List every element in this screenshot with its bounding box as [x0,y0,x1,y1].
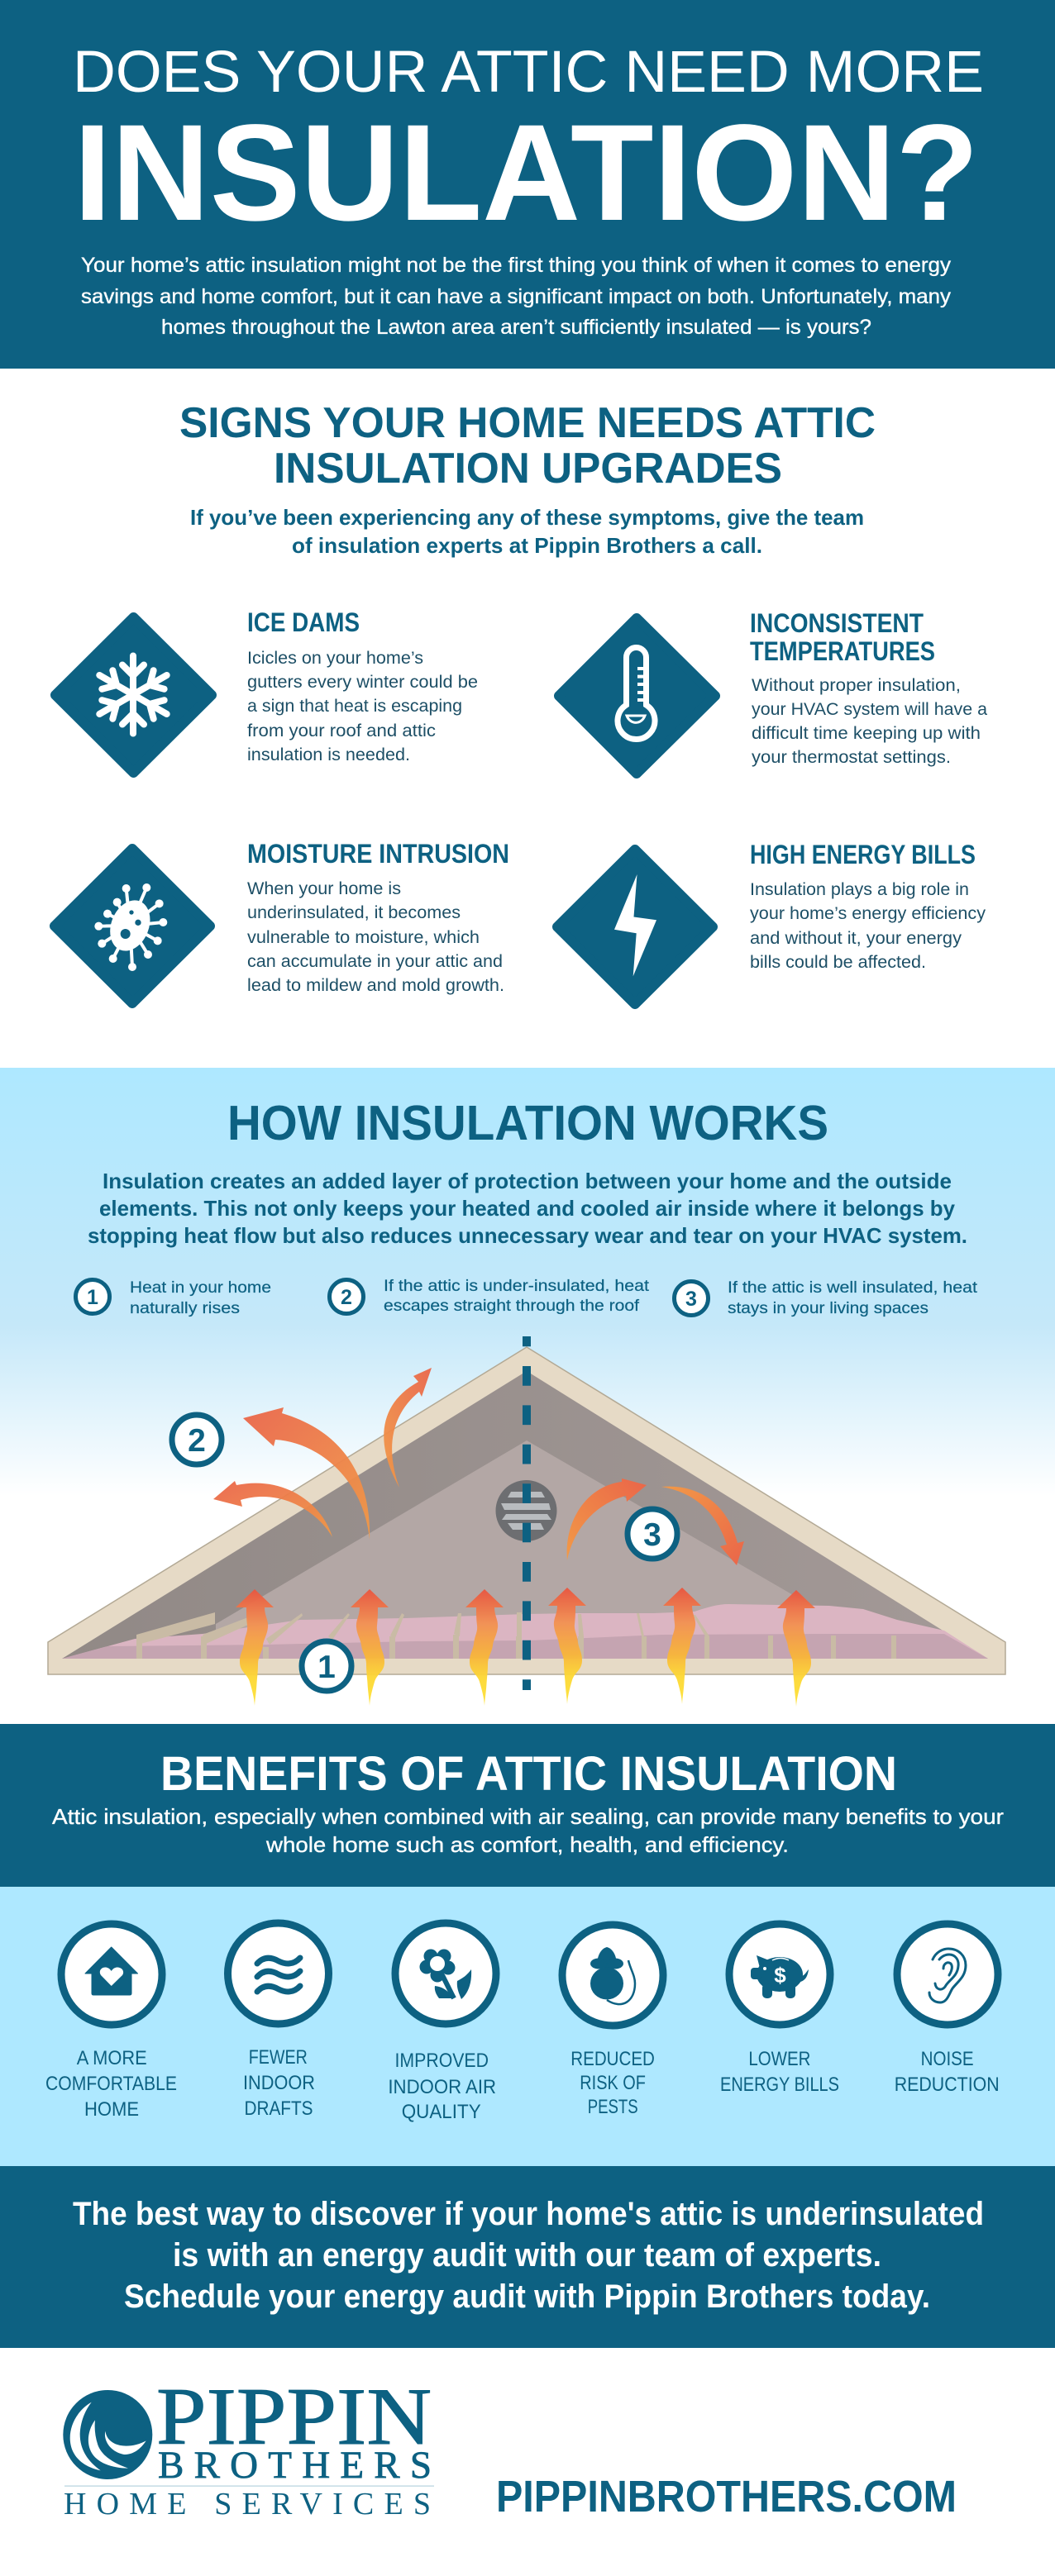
badge 2: 2 [188,1423,206,1459]
item: moisture intrusion: can accumulate in your attic and [247,951,503,971]
step 3 [675,1278,978,1317]
step 2: escapes straight through the roof [384,1297,640,1315]
step 1: Heat in your home [130,1278,271,1297]
benefit: noise reduction: NOISE [921,2048,974,2070]
signs subheading: If you’ve been experiencing any of these symptoms, give the team [190,505,864,530]
item: moisture intrusion: MOISTURE INTRUSION [247,839,509,869]
logo emblem [63,2390,152,2479]
signs heading: INSULATION UPGRADES [274,445,782,493]
roof and floor frame [48,1347,1005,1674]
panel: header [0,0,1055,369]
benefits paragraph [52,1804,1004,1857]
title line: insulation: INSULATION? [74,97,979,250]
intro paragraph: homes throughout the Lawton area aren’t sufficiently insulated — is yours? [161,316,871,339]
signs heading: SIGNS YOUR HOME NEEDS ATTIC [179,399,876,447]
logo wordmark [64,2372,432,2521]
benefit: fewer drafts: INDOOR [243,2072,315,2094]
attic air space [62,1371,988,1659]
item: moisture intrusion [247,839,509,995]
item: high energy bills: Insulation plays a big role in [750,879,969,899]
signs heading [179,399,876,493]
benefit: comfortable home [45,1924,177,2121]
panel: call to action [0,2166,1055,2348]
logo wordmark: HOME SERVICES [64,2487,431,2521]
call to action text [73,2196,984,2315]
attic cross-section diagram [48,1336,1005,1707]
icon: thermometer diamond [559,618,715,774]
call to action text: The best way to discover if your home's attic is underinsulated [73,2196,984,2232]
panel: benefits header [0,1724,1055,1887]
benefit: indoor air quality: QUALITY [402,2101,481,2123]
badge 2 [172,1415,222,1464]
item: high energy bills: HIGH ENERGY BILLS [750,840,976,869]
signs subheading: of insulation experts at Pippin Brothers a call. [292,533,762,558]
item: high energy bills: bills could be affected. [750,952,926,972]
logo [63,2372,434,2521]
item: high energy bills: and without it, your energy [750,928,962,948]
item: inconsistent temperatures: your thermostat settings. [752,747,951,767]
item: moisture intrusion: vulnerable to moisture, which [247,927,480,947]
arrows: heat rising [236,1588,815,1707]
item: moisture intrusion: When your home is [247,879,401,898]
item: inconsistent temperatures: difficult time keeping up with [752,723,981,743]
step 1 [76,1278,271,1317]
step 2 [329,1277,650,1315]
icon: snowflake diamond [55,617,212,773]
benefit: comfortable home: COMFORTABLE [45,2073,177,2095]
attic vent [496,1480,557,1541]
how heading: HOW INSULATION WORKS [227,1096,828,1150]
signs subheading [190,505,864,558]
item: inconsistent temperatures: Without proper insulation, [752,675,961,695]
website address: PIPPINBROTHERS.COM [496,2472,957,2521]
step 3: 3 [685,1288,697,1311]
benefit: comfortable home: A MORE [77,2047,147,2069]
benefit: lower energy bills: $ [774,1963,786,1988]
badge 3 [628,1509,677,1559]
step 2: If the attic is under-insulated, heat [384,1277,650,1295]
benefit: indoor air quality [388,1923,496,2123]
benefit: noise reduction: REDUCTION [895,2074,1000,2096]
step 2: 2 [341,1286,352,1309]
benefit: noise reduction [895,1924,1000,2096]
item: moisture intrusion: underinsulated, it becomes [247,902,461,922]
icon: lightning bolt diamond [557,850,713,1004]
benefit: fewer drafts: DRAFTS [245,2097,313,2120]
step 1: 1 [87,1286,98,1309]
item: inconsistent temperatures [750,608,987,767]
logo wordmark: PIPPIN [156,2372,432,2462]
how paragraph: Insulation creates an added layer of protection between your home and the outside [103,1169,952,1193]
benefit: reduced pests: REDUCED [570,2048,655,2070]
how paragraph: stopping heat flow but also reduces unnecessary wear and tear on your HVAC system. [88,1223,967,1248]
insulation lower layer [62,1634,988,1659]
dashed centre line [523,1336,531,1690]
item: ice dams: ICE DAMS [247,607,360,637]
item: ice dams: from your roof and attic [247,721,436,740]
item: high energy bills [750,840,986,972]
step 3: If the attic is well insulated, heat [728,1278,978,1297]
title line: does your attic need more: DOES YOUR ATTIC NEED MORE [73,40,984,105]
benefit: reduced pests: RISK OF [580,2072,646,2094]
item: ice dams: Icicles on your home’s [247,648,423,668]
arrows: heat escaping through roof [213,1368,432,1540]
item: inconsistent temperatures: INCONSISTENT [750,608,924,638]
benefit: comfortable home: HOME [84,2098,139,2121]
benefit: fewer drafts [228,1923,329,2120]
arrows: heat retained in living space [567,1478,744,1565]
benefit: lower energy bills [720,1924,839,2096]
item: inconsistent temperatures: TEMPERATURES [750,636,935,666]
item: ice dams: a sign that heat is escaping [247,696,462,716]
how paragraph [88,1169,967,1248]
benefits paragraph: Attic insulation, especially when combined with air sealing, can provide many benefits to your [52,1804,1004,1829]
step 3: stays in your living spaces [728,1299,928,1317]
benefit: reduced pests [562,1925,663,2118]
item: inconsistent temperatures: your HVAC system will have a [752,699,987,719]
benefit: indoor air quality: IMPROVED [395,2050,489,2072]
item: ice dams [247,607,478,764]
panel: signs your home needs upgrades [0,369,1055,1068]
call to action text: Schedule your energy audit with Pippin Brothers today. [124,2278,930,2315]
item: ice dams: insulation is needed. [247,745,410,764]
wood joists [136,1612,896,1659]
benefits paragraph: whole home such as comfort, health, and efficiency. [265,1832,789,1857]
benefit: indoor air quality: INDOOR AIR [388,2076,496,2098]
badge 1: 1 [317,1650,336,1685]
panel: benefits list [0,1887,1055,2166]
benefit: lower energy bills: ENERGY BILLS [720,2074,839,2096]
badge 1 [302,1641,351,1691]
intro paragraph: Your home’s attic insulation might not be the first thing you think of when it comes to energy [81,254,952,277]
benefit: fewer drafts: FEWER [249,2046,308,2069]
item: ice dams: gutters every winter could be [247,672,478,692]
logo wordmark: BROTHERS [158,2444,432,2487]
step 1: naturally rises [130,1299,240,1317]
badge 3: 3 [643,1517,661,1553]
insulation upper layer [62,1604,988,1659]
how paragraph: elements. This not only keeps your heated and cooled air inside where it belongs by [99,1196,956,1221]
item: moisture intrusion: lead to mildew and mold growth. [247,975,504,995]
benefit: reduced pests: PESTS [588,2096,638,2118]
panel: footer [0,2348,1055,2576]
call to action text: is with an energy audit with our team of experts. [173,2237,881,2274]
intro paragraph [81,254,952,339]
panel: how insulation works [0,1068,1055,1724]
intro paragraph: savings and home comfort, but it can have a significant impact on both. Unfortunately, many [81,285,952,308]
benefits heading: BENEFITS OF ATTIC INSULATION [160,1747,897,1801]
lit attic interior [216,1440,814,1659]
benefit: lower energy bills: LOWER [748,2048,810,2070]
icon: mold spore diamond [55,849,210,1003]
item: high energy bills: your home’s energy efficiency [750,903,986,923]
